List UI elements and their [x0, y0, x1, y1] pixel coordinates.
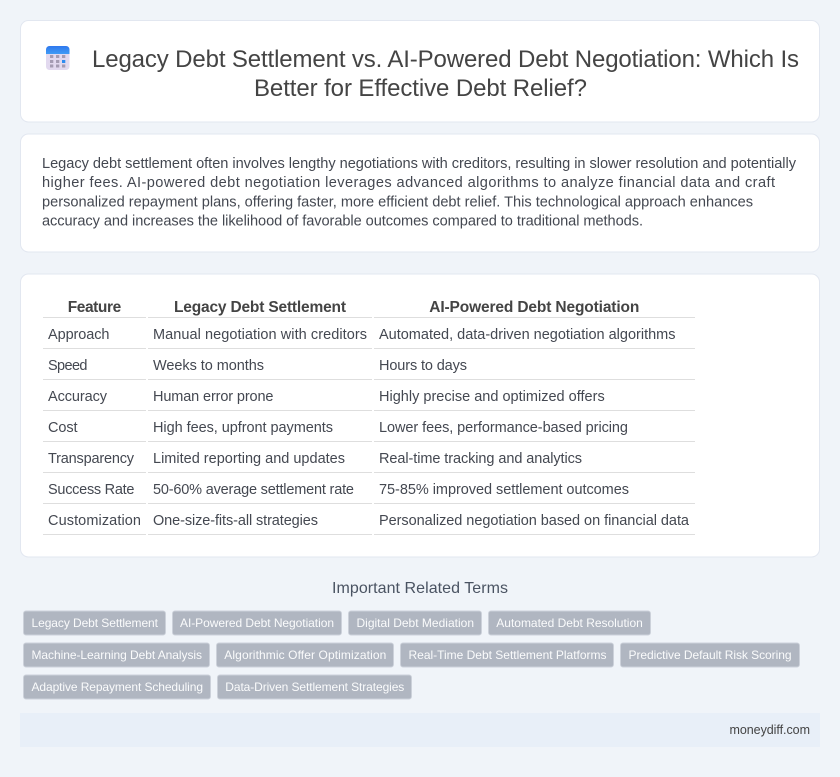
- tag: Digital Debt Mediation: [356, 616, 474, 630]
- table header row: AI-Powered Debt Negotiation: [429, 299, 639, 316]
- table row: customization: Customization: [48, 513, 141, 529]
- table row: customization: Personalized negotiation based on financial data: [379, 513, 690, 529]
- tag: AI-Powered Debt Negotiation: [180, 616, 334, 630]
- tag: Predictive Default Risk Scoring: [628, 648, 792, 662]
- table row: cost: Lower fees, performance-based pricing: [379, 420, 628, 436]
- tag: [488, 611, 650, 635]
- tag: Legacy Debt Settlement: [32, 616, 159, 630]
- table header row: [68, 299, 639, 316]
- table row: approach: Approach: [48, 327, 110, 343]
- table row: approach: Manual negotiation with creditors: [153, 327, 367, 343]
- table row: accuracy: [48, 389, 605, 405]
- tag: Automated Debt Resolution: [496, 616, 643, 630]
- text block: summary: personalized repayment plans, offering faster, more efficient debt relief. This technological approach enhances: [42, 194, 753, 210]
- icon: calendar: [46, 46, 70, 70]
- tag: [400, 643, 614, 667]
- title: Legacy Debt Settlement vs. AI-Powered Debt Negotiation: Which Is: [92, 46, 799, 73]
- tag: Real-Time Debt Settlement Platforms: [408, 648, 606, 662]
- panel: title header: [20, 20, 820, 122]
- tag: [218, 675, 412, 699]
- text block: summary: higher fees. AI-powered debt negotiation leverages advanced algorithms to analyze financial data and craft: [42, 175, 775, 191]
- tag: [24, 675, 210, 699]
- tag group: related terms: [24, 611, 800, 699]
- table row: transparency: Transparency: [48, 451, 135, 467]
- heading: important related terms: Important Related Terms: [332, 580, 508, 597]
- text block: summary: Legacy debt settlement often involves lengthy negotiations with creditors, resulting in slower resolution and potentially: [42, 156, 797, 172]
- table row: speed: Weeks to months: [153, 358, 264, 374]
- table row: transparency: Real-time tracking and analytics: [379, 451, 582, 467]
- table row: cost: [48, 420, 628, 436]
- tag: Adaptive Repayment Scheduling: [32, 680, 203, 694]
- table row: transparency: Limited reporting and updates: [153, 451, 345, 467]
- table row: speed: Speed: [48, 358, 88, 374]
- table row: approach: [48, 327, 676, 343]
- table row: cost: Cost: [48, 420, 78, 436]
- table header row: Legacy Debt Settlement: [174, 299, 346, 316]
- tag: Data-Driven Settlement Strategies: [225, 680, 404, 694]
- tag: Machine-Learning Debt Analysis: [32, 648, 202, 662]
- title: Better for Effective Debt Relief?: [254, 75, 587, 102]
- text block: summary: accuracy and increases the likelihood of favorable outcomes compared to traditional methods.: [42, 214, 643, 230]
- tag: Algorithmic Offer Optimization: [224, 648, 386, 662]
- tag: [24, 643, 210, 667]
- table row: success rate: 50-60% average settlement rate: [153, 482, 354, 498]
- table row: customization: One-size-fits-all strategies: [153, 513, 318, 529]
- panel: comparison table: [20, 274, 820, 557]
- table row: transparency: [48, 451, 582, 467]
- table header row: Feature: [68, 299, 122, 316]
- table row: speed: [48, 358, 467, 374]
- tag: [172, 611, 342, 635]
- title: [92, 46, 799, 102]
- table row: accuracy: Human error prone: [153, 389, 274, 405]
- table row: success rate: [48, 482, 629, 498]
- table row: speed: Hours to days: [379, 358, 467, 374]
- table row: accuracy: Accuracy: [48, 389, 108, 405]
- footer text: source: moneydiff.com: [730, 723, 810, 737]
- tag: [24, 611, 166, 635]
- table row: success rate: 75-85% improved settlement outcomes: [379, 482, 629, 498]
- panel: summary paragraph: [20, 134, 820, 252]
- table row: approach: Automated, data-driven negotiation algorithms: [379, 327, 676, 343]
- tag: [348, 611, 482, 635]
- text block: summary: [42, 156, 797, 230]
- table row: accuracy: Highly precise and optimized offers: [379, 389, 605, 405]
- table row: customization: [48, 513, 690, 529]
- tag: [620, 643, 800, 667]
- tag: [216, 643, 394, 667]
- table row: cost: High fees, upfront payments: [153, 420, 333, 436]
- footer bar: [20, 713, 820, 747]
- table row: success rate: Success Rate: [48, 482, 134, 498]
